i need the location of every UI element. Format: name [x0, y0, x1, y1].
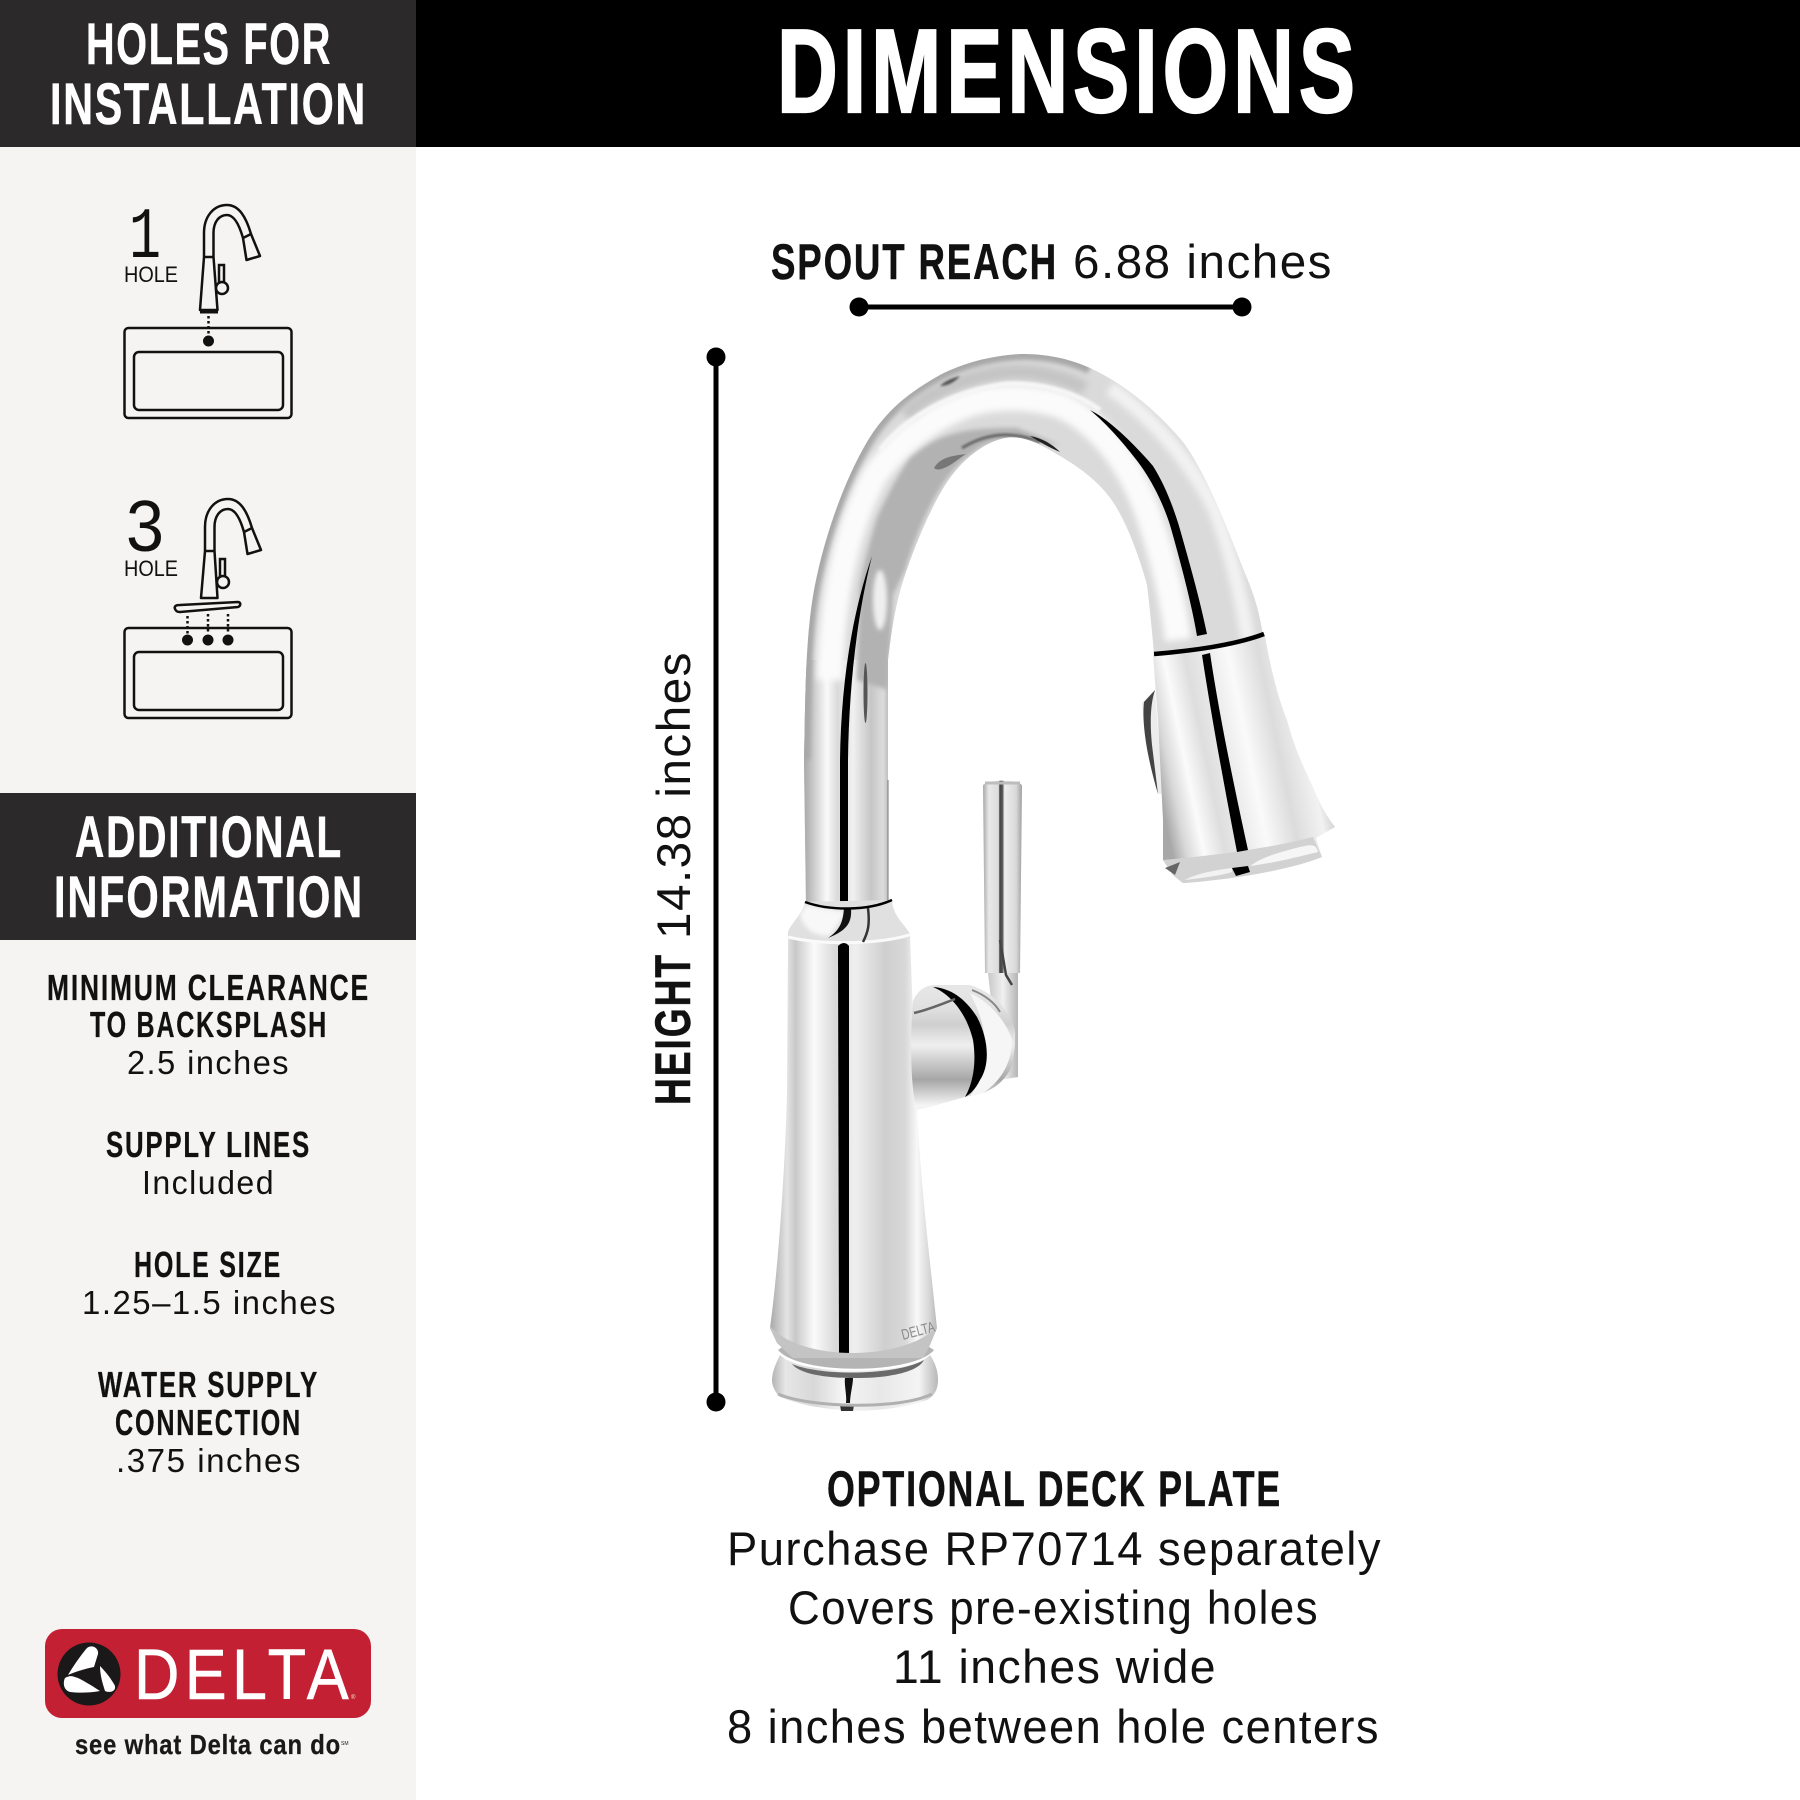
text block: hole size — [82, 1244, 337, 1321]
icon: one hole installation: HOLE — [124, 262, 178, 287]
heading: holes for installation: INSTALLATION — [50, 72, 367, 137]
heading: additional information: ADDITIONAL — [75, 805, 343, 870]
text block: water supply connection: CONNECTION — [115, 1402, 302, 1443]
heading: additional information: INFORMATION — [54, 865, 364, 930]
label: spout reach: SPOUT REACH — [771, 234, 1058, 290]
logo: delta: ® — [351, 1694, 356, 1701]
spray head — [1142, 634, 1335, 883]
title banner: dimensions — [416, 0, 1800, 147]
handle hub — [911, 985, 1015, 1110]
logo: delta: DELTA — [134, 1636, 354, 1715]
text block: minimum clearance: MINIMUM CLEARANCE — [47, 967, 370, 1008]
text block: water supply connection: WATER SUPPLY — [98, 1364, 319, 1405]
title banner: dimensions: DIMENSIONS — [777, 5, 1360, 138]
logo: delta: see what Delta can do — [75, 1729, 341, 1760]
label: spout reach: 6.88 inches — [1073, 235, 1333, 288]
icon: one hole installation — [124, 197, 292, 418]
text block: optional deck plate: OPTIONAL DECK PLATE — [827, 1461, 1282, 1517]
text block: minimum clearance: 2.5 inches — [127, 1044, 290, 1081]
text block: minimum clearance: TO BACKSPLASH — [90, 1004, 328, 1045]
label: height: HEIGHT — [645, 953, 701, 1105]
faucet body — [770, 900, 938, 1365]
spout — [800, 354, 1264, 910]
icon: three hole installation: HOLE — [124, 556, 178, 581]
faucet body: DELTA — [900, 1319, 937, 1344]
heading: additional information — [0, 793, 416, 940]
icon: three hole installation: 3 — [126, 487, 164, 567]
arrow: height dimension line — [706, 348, 726, 1412]
text block: hole size: 1.25–1.5 inches — [82, 1284, 337, 1321]
text block: optional deck plate: Covers pre-existing holes — [788, 1581, 1319, 1634]
faucet base — [772, 1355, 938, 1411]
text block: water supply connection: .375 inches — [116, 1442, 302, 1479]
text block: supply lines: SUPPLY LINES — [106, 1124, 311, 1165]
label: spout reach — [771, 234, 1333, 290]
text block: supply lines — [106, 1124, 311, 1201]
text block: supply lines: Included — [142, 1164, 275, 1201]
arrow: spout reach dimension line — [850, 298, 1252, 316]
label: height — [645, 651, 701, 1105]
text block: optional deck plate: 11 inches wide — [893, 1640, 1217, 1693]
text block: hole size: HOLE SIZE — [134, 1244, 282, 1285]
icon: three hole installation — [124, 487, 292, 718]
faucet illustration — [770, 354, 1335, 1411]
text block: minimum clearance — [47, 967, 370, 1081]
heading: holes for installation: HOLES FOR — [86, 12, 332, 77]
text block: optional deck plate: Purchase RP70714 separately — [727, 1522, 1382, 1575]
sidebar panel — [0, 0, 416, 1800]
chamfer shadow — [778, 1345, 934, 1369]
logo: delta — [45, 1629, 371, 1760]
heading: holes for installation — [0, 0, 416, 147]
icon: one hole installation: 1 — [129, 197, 161, 279]
lever handle — [983, 781, 1022, 1080]
logo: delta: SM — [341, 1741, 348, 1747]
label: height: 14.38 inches — [647, 651, 700, 939]
text block: optional deck plate — [727, 1461, 1382, 1753]
text block: optional deck plate: 8 inches between hole centers — [727, 1700, 1380, 1753]
text block: water supply connection — [98, 1364, 319, 1479]
